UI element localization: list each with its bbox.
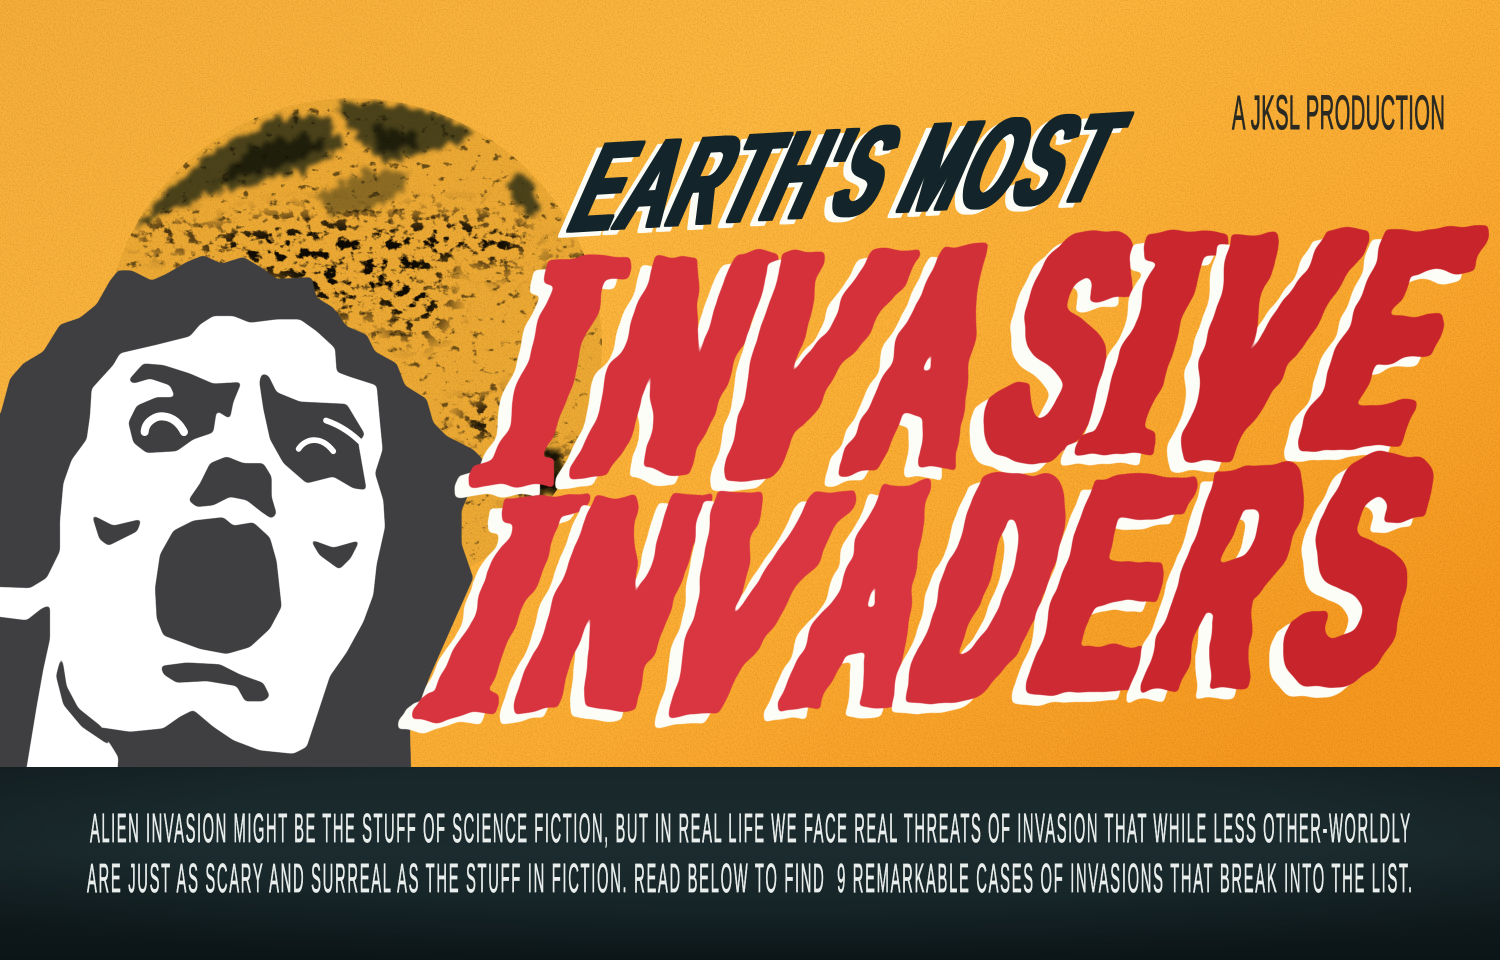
title: invasive: S [955, 170, 1170, 521]
mouth [155, 517, 282, 654]
intro text [87, 805, 1412, 901]
globe: speckled earth [104, 98, 602, 596]
left eye and brow [128, 363, 242, 453]
hair silhouette [0, 255, 483, 788]
title: invaders: I [382, 422, 620, 786]
face [0, 316, 385, 788]
title: invasive: V [652, 185, 946, 542]
title: invasive: I [1050, 160, 1254, 522]
right eyelid streak [326, 420, 363, 445]
title: invaders: R [1116, 400, 1342, 754]
panel: intro band [0, 767, 1500, 960]
right cheek [310, 539, 360, 570]
title: invaders: N [488, 433, 740, 772]
title: invasive [444, 160, 1500, 554]
illustration: screaming face [0, 255, 483, 788]
intro text: ARE JUST AS SCARY AND SURREAL AS THE STUFF IN FICTION. READ BELOW TO FIND 9 REMARKABLE CASES OF INVASIONS THAT BREAK INTO THE LIST. [87, 855, 1412, 901]
title: invaders: E [1003, 412, 1220, 753]
right eye and brow [259, 374, 367, 490]
title: invasive: I [444, 183, 658, 554]
title: invaders: S [1252, 391, 1464, 750]
title: invaders: D [877, 406, 1109, 769]
title: invasive: V [1111, 168, 1396, 523]
intro text: ALIEN INVASION MIGHT BE THE STUFF OF SCIENCE FICTION, BUT IN REAL LIFE WE FACE REAL THREATS OF INVASION THAT WHILE LESS OTHER-WORLDLY [90, 805, 1410, 851]
neck crease [56, 654, 112, 747]
background: orange sky [0, 0, 1500, 768]
right eye highlight [299, 440, 333, 451]
title: invaders: V [601, 427, 881, 779]
credit line: A JKSL PRODUCTION [1232, 86, 1445, 139]
title: invasive: A [821, 181, 1042, 535]
nose [188, 456, 277, 519]
left cheek [92, 514, 142, 546]
lower lip [161, 662, 270, 701]
title: invasive: N [543, 190, 806, 537]
paper grain on sky [0, 0, 1500, 768]
title: invaders [382, 391, 1464, 786]
title: invaders: A [762, 418, 983, 772]
title: earth's most: EARTH'S MOST [552, 86, 1144, 260]
left eye highlight [145, 416, 184, 432]
